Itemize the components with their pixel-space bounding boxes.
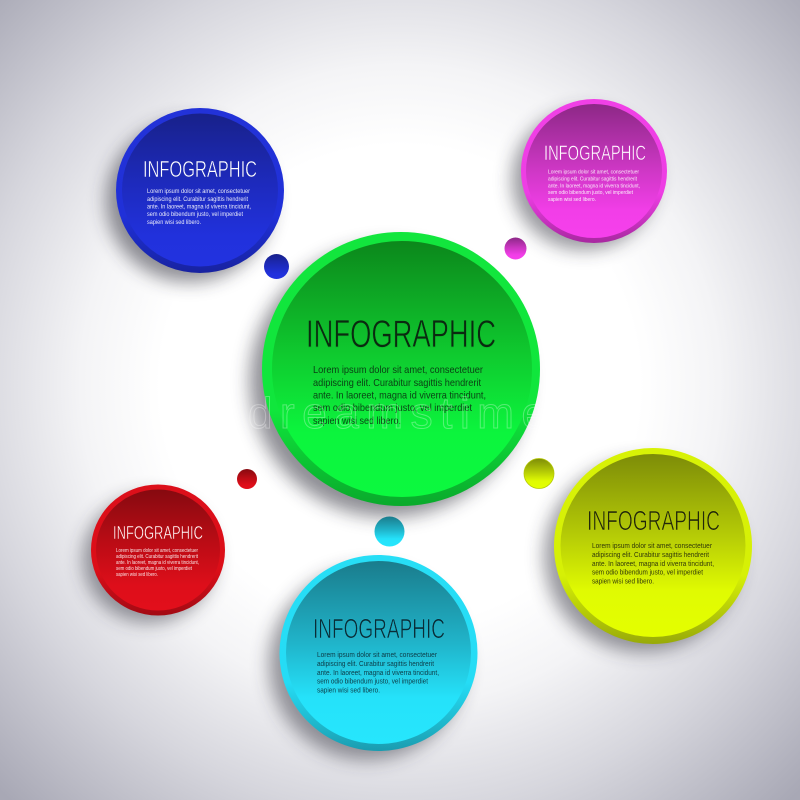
text block: blue: [147, 188, 251, 226]
panel: blue circle: [106, 108, 284, 282]
panel: red circle: [83, 484, 225, 623]
text block: cyan: Lorem ipsum dolor sit amet, consectetuer: [317, 650, 437, 659]
text block: yellow: Lorem ipsum dolor sit amet, consectetuer: [592, 541, 712, 550]
text block: blue: sapien wisi sed libero.: [147, 219, 201, 226]
text block: green: ante. In laoreet, magna id viverra tincidunt,: [313, 390, 486, 402]
icon: cyan dot: [374, 516, 404, 546]
text block: red: [116, 548, 199, 578]
heading: yellow: INFOGRAPHIC: [587, 505, 720, 536]
text block: cyan: [317, 650, 439, 694]
text block: green: [313, 364, 486, 427]
icon: magenta dot: [504, 238, 526, 260]
panel: green central circle: [250, 232, 540, 517]
text block: cyan: adipiscing elit. Curabitur sagittis hendrerit: [317, 659, 435, 668]
text block: green: Lorem ipsum dolor sit amet, consectetuer: [313, 364, 483, 376]
text block: yellow: adipiscing elit. Curabitur sagittis hendrerit: [592, 550, 710, 559]
text block: red: ante. In laoreet, magna id viverra tincidunt,: [116, 560, 199, 566]
text block: green: adipiscing elit. Curabitur sagittis hendrerit: [313, 377, 481, 389]
heading: magenta: INFOGRAPHIC: [544, 142, 646, 165]
panel: yellow circle: [544, 448, 752, 652]
text block: cyan: ante. In laoreet, magna id viverra tincidunt,: [317, 668, 439, 677]
text block: yellow: sapien wisi sed libero.: [592, 576, 654, 586]
text block: magenta: sem odio bibendum justo, vel imperdiet: [548, 190, 633, 196]
text block: cyan: sapien wisi sed libero.: [317, 686, 380, 694]
text block: magenta: sapien wisi sed libero.: [548, 197, 596, 203]
text block: blue: adipiscing elit. Curabitur sagittis hendrerit: [147, 196, 248, 203]
text block: red: Lorem ipsum dolor sit amet, consectetuer: [116, 548, 198, 554]
heading: red: INFOGRAPHIC: [113, 523, 203, 543]
text block: red: sapien wisi sed libero.: [116, 572, 158, 578]
text block: magenta: [548, 170, 640, 203]
icon: yellow dot: [524, 458, 554, 488]
heading: blue: INFOGRAPHIC: [143, 156, 257, 182]
text block: red: sem odio bibendum justo, vel imperdiet: [116, 566, 193, 572]
text block: cyan: sem odio bibendum justo, vel imperdiet: [317, 676, 429, 686]
watermark: dreamstime: [248, 389, 546, 438]
icon: red dot: [237, 469, 257, 489]
panel: magenta circle: [512, 99, 667, 250]
text block: blue: Lorem ipsum dolor sit amet, consectetuer: [147, 188, 250, 195]
panel: cyan circle: [269, 555, 478, 760]
text block: magenta: Lorem ipsum dolor sit amet, consectetuer: [548, 170, 639, 176]
text block: red: adipiscing elit. Curabitur sagittis hendrerit: [116, 554, 199, 560]
text block: magenta: ante. In laoreet, magna id viverra tincidunt,: [548, 184, 640, 190]
heading: cyan: INFOGRAPHIC: [313, 613, 445, 644]
text block: yellow: ante. In laoreet, magna id viverra tincidunt,: [592, 559, 714, 568]
text block: blue: ante. In laoreet, magna id viverra tincidunt,: [147, 204, 251, 210]
text block: yellow: [592, 541, 714, 586]
icon: blue dot: [264, 254, 289, 279]
text block: blue: sem odio bibendum justo, vel imperdiet: [147, 211, 243, 218]
heading: green: INFOGRAPHIC: [306, 313, 496, 356]
text block: green: sapien wisi sed libero.: [313, 415, 401, 427]
text block: green: sem odio bibendum justo, vel imperdiet: [313, 402, 472, 414]
text block: magenta: adipiscing elit. Curabitur sagittis hendrerit: [548, 176, 637, 182]
text block: yellow: sem odio bibendum justo, vel imperdiet: [592, 568, 704, 576]
